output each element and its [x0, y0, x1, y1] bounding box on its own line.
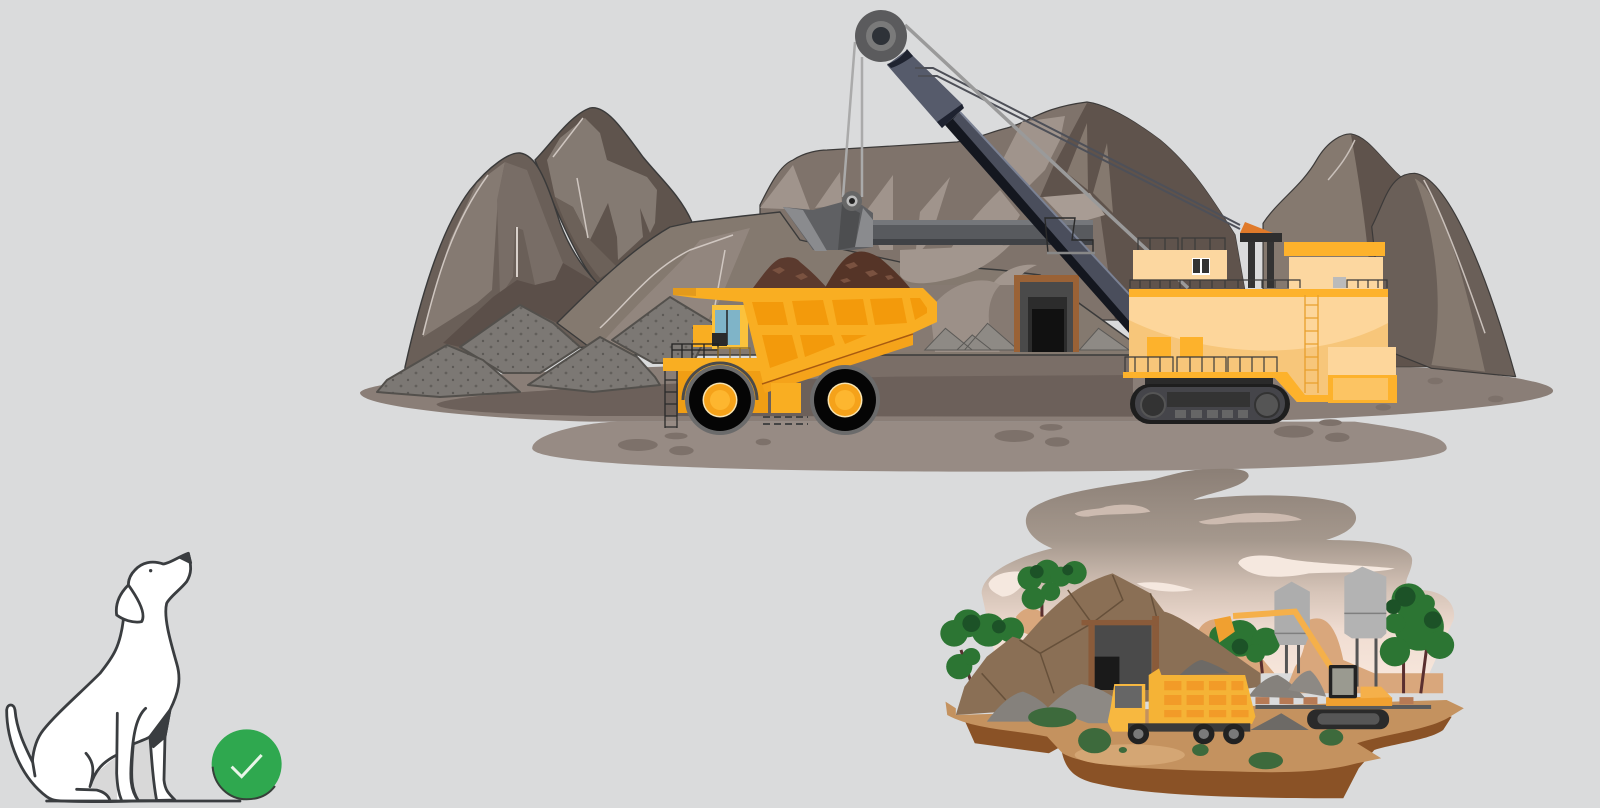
excavator building: [1123, 222, 1397, 403]
right mountains: [1263, 134, 1516, 377]
dog with check badge: [7, 553, 282, 802]
smoke cloud: [982, 469, 1454, 673]
boom cables to bucket: [843, 42, 862, 197]
small piles by mine: [925, 323, 1129, 350]
rail track: [1255, 701, 1431, 709]
left front mountain: [405, 153, 640, 370]
small dump truck: [1108, 668, 1255, 744]
background rocks: [1016, 608, 1443, 693]
check badge: [212, 729, 282, 799]
bushes: [1028, 707, 1343, 769]
bucket and arm: [783, 191, 1093, 251]
scene: large mining site: [360, 10, 1553, 472]
center back mountain: [760, 102, 1250, 320]
left back mountain: [535, 108, 700, 283]
gravel piles: [377, 297, 713, 397]
scene: small mining island: [940, 469, 1464, 798]
crawler track: [1130, 378, 1290, 424]
center front hill: [557, 212, 1130, 355]
gravel piles small: [987, 660, 1326, 730]
dirt piles: [753, 251, 910, 288]
clouds: [989, 505, 1395, 597]
small excavator: [1214, 612, 1392, 729]
island base: [945, 700, 1464, 798]
hill: [956, 573, 1261, 715]
trees: [940, 560, 1454, 693]
silos: [1274, 567, 1386, 687]
dog: [7, 553, 240, 802]
mine entrance small: [1082, 616, 1159, 691]
ground: [360, 350, 1553, 472]
dump truck: [663, 288, 937, 435]
shovel boom: [887, 49, 1130, 334]
boom cables: [905, 25, 1240, 288]
mine entrance: [1014, 275, 1079, 352]
pulley: [855, 10, 907, 62]
